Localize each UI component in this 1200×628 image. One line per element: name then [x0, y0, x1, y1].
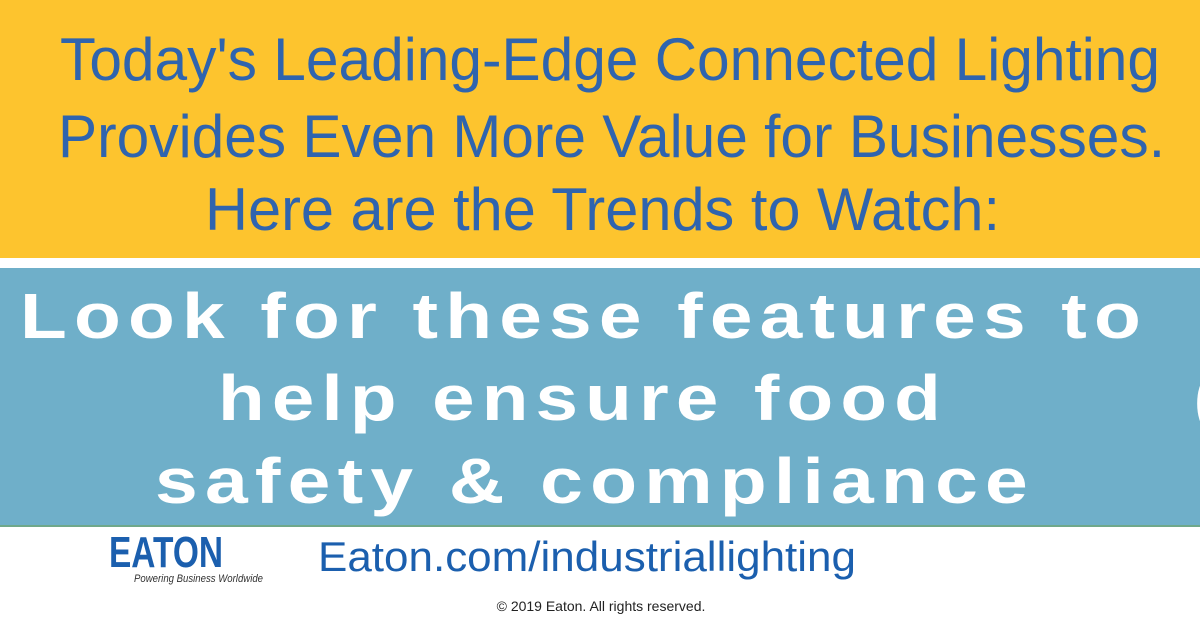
- banner text: safety & compliance: [155, 445, 1035, 517]
- banner text: help ensure food: [218, 362, 948, 434]
- panel: yellow header: [0, 0, 1200, 258]
- title: Today's Leading-Edge Connected Lighting: [60, 26, 1160, 93]
- logo: Eaton: EATON: [109, 528, 223, 577]
- url: Eaton.com/industriallighting: [318, 533, 856, 580]
- logo: Eaton: Powering Business Worldwide: [134, 573, 263, 585]
- footer: [109, 528, 856, 614]
- copyright: © 2019 Eaton. All rights reserved.: [497, 598, 705, 614]
- banner text: [20, 280, 1200, 517]
- title: Provides Even More Value for Businesses.: [58, 103, 1165, 170]
- title: Here are the Trends to Watch:: [205, 176, 1000, 243]
- banner text: Look for these features to: [20, 280, 1148, 352]
- panel: blue features banner: [0, 268, 1200, 527]
- title: [58, 26, 1165, 243]
